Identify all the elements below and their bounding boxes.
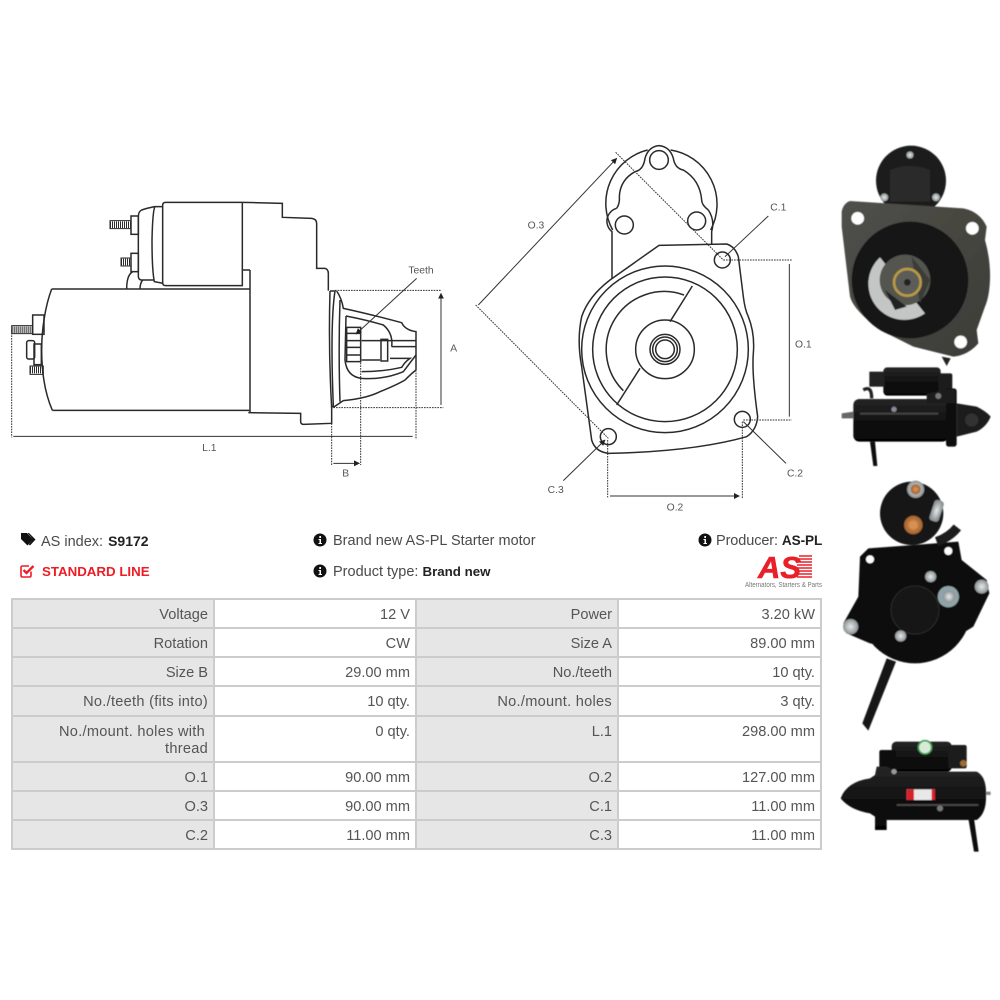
row: threaded holes and L.1: No./mount. holes with xyxy=(59,724,205,740)
icon: info xyxy=(314,564,326,578)
label: B: B xyxy=(342,468,349,479)
row: O.3 and C.1 xyxy=(13,792,820,819)
row: O.3 and C.1: 90.00 mm xyxy=(345,799,410,815)
row: O.3 and C.1: C.1 xyxy=(589,799,612,815)
row: size B and teeth: 10 qty. xyxy=(772,665,815,681)
row: size B and teeth xyxy=(13,658,820,685)
row: threaded holes and L.1: thread xyxy=(165,740,208,756)
row: size B and teeth: No./teeth xyxy=(553,665,612,681)
label: C.3: C.3 xyxy=(548,485,564,496)
row: threaded holes and L.1: 298.00 mm xyxy=(742,724,815,740)
row: teeth fits into and mount holes: 3 qty. xyxy=(780,694,815,710)
row: rotation and size A: Size A xyxy=(571,636,612,652)
row: size B and teeth: 29.00 mm xyxy=(345,665,410,681)
label: C.2: C.2 xyxy=(787,468,803,479)
product type: Product type: Brand new xyxy=(333,564,490,580)
row: voltage and power: 12 V xyxy=(380,607,410,623)
row: O.3 and C.1: O.3 xyxy=(184,799,208,815)
icon: info xyxy=(314,534,326,546)
row: threaded holes and L.1: 0 qty. xyxy=(375,724,410,740)
photo: starter motor side view with label xyxy=(841,741,991,852)
brand new text: Brand new AS-PL Starter motor xyxy=(333,533,536,549)
row: C.2 and C.3: 11.00 mm xyxy=(346,828,410,844)
label: O.1: O.1 xyxy=(795,339,812,350)
row: rotation and size A: CW xyxy=(386,636,410,652)
AS logo: AS xyxy=(757,550,801,585)
dimension lines xyxy=(476,152,792,498)
row: voltage and power: Power xyxy=(571,607,612,623)
row: O.1 and O.2: O.1 xyxy=(184,770,208,786)
photo: starter motor rear view xyxy=(843,481,989,731)
photo: starter motor side view xyxy=(842,367,991,466)
row: rotation and size A: 89.00 mm xyxy=(750,636,815,652)
label: O.3: O.3 xyxy=(528,221,545,232)
AS logo: Alternators, Starters & Parts xyxy=(745,580,822,589)
side view technical drawing xyxy=(12,202,457,479)
flange and rear housing outline xyxy=(579,146,758,453)
row: voltage and power xyxy=(13,600,820,627)
label: A: A xyxy=(450,343,457,354)
row: teeth fits into and mount holes: 10 qty. xyxy=(367,694,410,710)
standard line: STANDARD LINE xyxy=(42,564,150,579)
row: teeth fits into and mount holes: No./mount. holes xyxy=(497,694,612,710)
row: C.2 and C.3: C.2 xyxy=(185,828,208,844)
row: C.2 and C.3: C.3 xyxy=(589,828,612,844)
starter motor side outline xyxy=(12,202,416,424)
AS index: AS index: S9172 xyxy=(41,533,149,550)
row: O.1 and O.2: O.2 xyxy=(588,770,612,786)
label: C.1: C.1 xyxy=(770,202,787,213)
row: size B and teeth: Size B xyxy=(166,665,208,681)
dimension lines xyxy=(12,278,443,465)
label: O.2: O.2 xyxy=(667,503,684,514)
row: O.1 and O.2: 90.00 mm xyxy=(345,770,410,786)
row: C.2 and C.3: 11.00 mm xyxy=(751,828,815,844)
row: C.2 and C.3 xyxy=(13,821,820,848)
icon: tags xyxy=(21,533,36,546)
row: threaded holes and L.1: L.1 xyxy=(592,724,612,740)
producer: Producer: AS-PL xyxy=(716,533,822,549)
row: rotation and size A: Rotation xyxy=(154,636,208,652)
row: O.1 and O.2 xyxy=(13,763,820,790)
AS logo xyxy=(745,550,822,589)
label: L.1: L.1 xyxy=(202,443,217,454)
row: threaded holes and L.1 xyxy=(13,717,820,761)
icon: info xyxy=(698,534,712,546)
row: teeth fits into and mount holes xyxy=(13,687,820,715)
row: voltage and power: Voltage xyxy=(159,607,208,623)
icon: checked square xyxy=(20,565,34,578)
specification table xyxy=(11,598,822,850)
label: Teeth: Teeth xyxy=(408,266,434,277)
photo: starter motor front flange xyxy=(842,146,990,366)
row: rotation and size A xyxy=(13,629,820,656)
row: voltage and power: 3.20 kW xyxy=(761,607,815,623)
row: O.3 and C.1: 11.00 mm xyxy=(751,799,815,815)
front view technical drawing xyxy=(476,146,812,514)
row: teeth fits into and mount holes: No./teeth (fits into) xyxy=(83,694,208,710)
row: O.1 and O.2: 127.00 mm xyxy=(742,770,815,786)
